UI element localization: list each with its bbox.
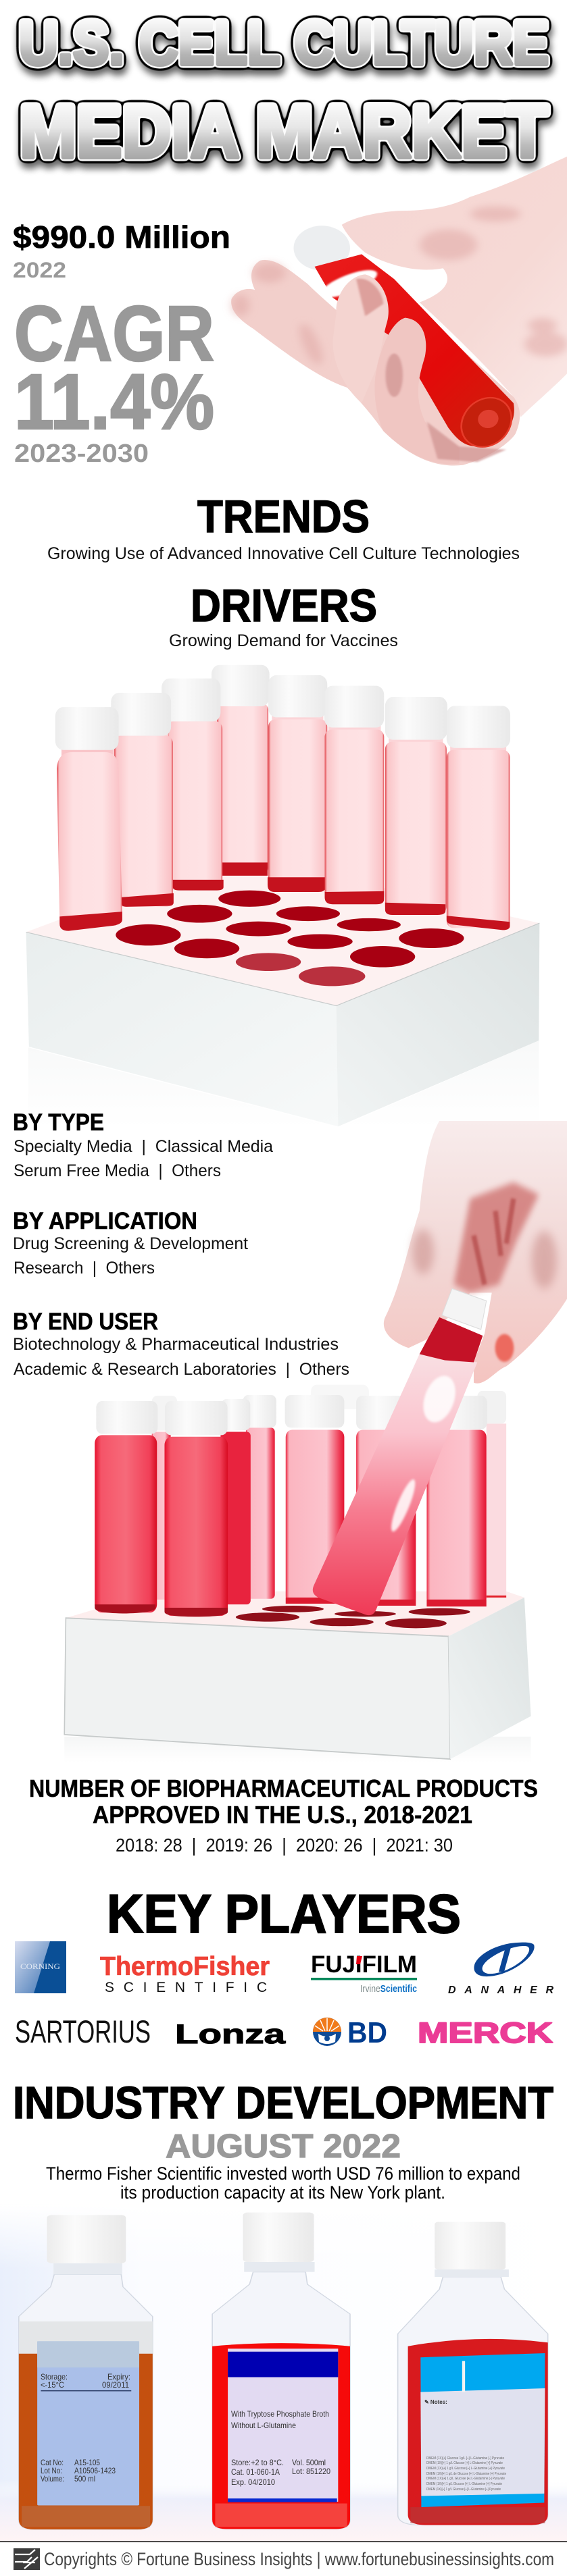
trends: [47, 491, 520, 563]
vial D: [243, 1395, 276, 1599]
bottle 2: Vol. 500ml: [292, 2458, 326, 2467]
key player logos: [15, 1941, 553, 2049]
logo: Danaher: [448, 1943, 553, 1996]
development text line 1: Thermo Fisher Scientific invested worth USD 76 million to expand: [46, 2163, 520, 2184]
forecast period: 2023-2030: [14, 440, 149, 468]
bottle 3: DMEM (1X)[+] 1 g/L Glucose [+] L-Glutamine [+] Pyruvate: [426, 2461, 503, 2465]
drivers text: Growing Demand for Vaccines: [169, 631, 398, 650]
bottle 3: DMEM (1X)[+] 1 g/L Glucose [+] L-Glutamine [+] Pyruvate: [426, 2467, 505, 2471]
glove palm shadow: [454, 1182, 539, 1292]
bottle 1: A15-105: [74, 2458, 100, 2467]
key players heading: KEY PLAYERS: [107, 1884, 461, 1945]
vial C: [220, 1399, 251, 1604]
logo: Thermo Fisher Scientific: SCIENTIFIC: [105, 1980, 267, 1995]
photo: pink vials in white rack: [26, 665, 539, 1128]
bottle 1: A10506-1423: [74, 2466, 116, 2475]
bottle 2: [212, 2213, 350, 2529]
vial 7: [385, 697, 447, 915]
bottle 1: Expiry:: [107, 2372, 130, 2382]
vial 3: [162, 679, 224, 891]
bottle 1: 09/2011: [102, 2380, 129, 2390]
red tube: [315, 255, 514, 446]
glove arm: [342, 157, 567, 417]
market value: $990.0 Million: [13, 219, 230, 255]
rack left face: [64, 1618, 450, 1759]
yearly figures: 2018: 28 | 2019: 26 | 2020: 26 | 2021: 30: [116, 1835, 453, 1856]
date: AUGUST 2022: [166, 2128, 401, 2165]
photo: three culture media bottles: [0, 2205, 567, 2542]
logo: Thermo Fisher Scientific: [100, 1952, 270, 1995]
tube bottom: [452, 390, 520, 454]
tube highlight: [317, 265, 381, 303]
lifted tube cap: [442, 1288, 487, 1330]
back vial centre cap: [311, 1385, 369, 1409]
photo background: [0, 2205, 567, 2542]
vial 5: [268, 675, 327, 892]
rack top: [26, 854, 539, 1005]
bottle 2: Store:+2 to 8°C.: [231, 2458, 284, 2467]
bottle 2: Exp. 04/2010: [231, 2477, 275, 2487]
glove palm and fingers: [231, 260, 520, 465]
bottle 1: Cat No:: [41, 2458, 64, 2467]
vial 1: [55, 707, 122, 931]
logo: Lonza: Lonza: [175, 2020, 286, 2049]
rack holes: [116, 891, 464, 986]
lower finger: [374, 318, 460, 464]
drivers heading: DRIVERS: [191, 580, 377, 631]
bottle 1: <-15°C: [41, 2380, 64, 2390]
tube cap: [294, 226, 350, 270]
rack reflection: [28, 1041, 539, 1128]
by type heading: BY TYPE: [13, 1109, 104, 1136]
back vial far right: [477, 1391, 506, 1598]
fingertip blotch: [356, 279, 383, 316]
trends text: Growing Use of Advanced Innovative Cell Culture Technologies: [47, 544, 520, 563]
CAGR value: 11.4%: [14, 358, 214, 446]
bottle 3: [398, 2222, 548, 2525]
lifted tube body: [313, 1354, 477, 1615]
development text line 2: its production capacity at its New York plant.: [120, 2182, 445, 2203]
logo: Fujifilm Irvine Scientific: [311, 1951, 417, 1995]
logo: Sartorius: SARTORIUS: [15, 2014, 151, 2049]
by application options line 2: Research | Others: [14, 1259, 155, 1278]
by application options line 1: Drug Screening & Development: [13, 1234, 248, 1253]
by end user: [13, 1309, 349, 1379]
market size stats: [13, 219, 230, 468]
bottle 1: Lot No:: [41, 2466, 62, 2475]
photo: gloved hand holding red tube: [231, 157, 567, 465]
logo: BD: [313, 2016, 387, 2049]
bottle 3: ✎ Notes:: [424, 2399, 447, 2405]
rack top: [66, 1592, 524, 1636]
CAGR label: CAGR: [14, 290, 214, 377]
logo: Merck: MERCK: [418, 2017, 553, 2049]
bottle 1: 500 ml: [74, 2474, 95, 2483]
glove blotches: [231, 206, 567, 367]
logo: Danaher: DANAHER: [448, 1984, 553, 1996]
palm red streaks: [474, 1199, 514, 1284]
by type options line 1: Specialty Media | Classical Media: [14, 1137, 273, 1156]
bottle 1: Volume:: [41, 2474, 64, 2483]
vial F: [356, 1396, 416, 1606]
by application heading: BY APPLICATION: [13, 1208, 197, 1234]
rack right face: [337, 923, 539, 1126]
icon: Fortune Business Insights logo: [14, 2548, 40, 2570]
by type: [13, 1109, 273, 1180]
industry development: [13, 2078, 553, 2203]
bottle 1: [19, 2215, 153, 2529]
by end user options line 2: Academic & Research Laboratories | Others: [14, 1360, 349, 1379]
rack holes: [236, 1606, 470, 1628]
glove: [384, 1121, 567, 1384]
footer: [14, 2548, 554, 2570]
drivers: [169, 580, 398, 650]
vial 2: [111, 693, 174, 907]
rack right face: [449, 1598, 531, 1759]
logo: BD: BD: [347, 2016, 387, 2049]
vial A: [95, 1401, 157, 1614]
logo: Fujifilm Irvine Scientific: IrvineScientific: [360, 1983, 417, 1995]
by end user heading: BY END USER: [13, 1309, 158, 1335]
approved biopharmaceutical products: [29, 1775, 538, 1856]
by end user options line 1: Biotechnology & Pharmaceutical Industries: [13, 1335, 339, 1354]
bottle 2: Without L-Glutamine: [231, 2421, 296, 2430]
back vial left: [152, 1396, 177, 1600]
lifted tube neck fluid: [420, 1317, 483, 1362]
bottle 3: DMEM (1X)[+] 1 g/L Glucose [+] L-Glutamine [+] Pyruvate: [426, 2482, 502, 2486]
title: [19, 9, 549, 174]
rack reflection: [64, 1737, 531, 1762]
finger over tube: [332, 274, 389, 403]
logo: Corning: CORNING: [20, 1963, 60, 1971]
bottle 3: DMEM (1X)[+] 1 g/L de Glucose [+] L-Glutamine [+] Pyruvate: [426, 2472, 506, 2476]
rack left face: [26, 932, 338, 1126]
logo: Corning: [15, 1941, 66, 1993]
lifted tube highlights: [387, 1370, 462, 1534]
vial 4: [212, 665, 270, 876]
by type options line 2: Serum Free Media | Others: [14, 1161, 221, 1180]
fingertip red patch: [495, 1334, 514, 1362]
bottle 3: DMEM (1X)[+] 1 g/L Glucose [+] L-Glutamine [-] Pyruvate: [426, 2477, 505, 2481]
logo: Thermo Fisher Scientific: ThermoFisher: [100, 1952, 270, 1981]
bottle 2: With Tryptose Phosphate Broth: [231, 2409, 329, 2419]
by application: [13, 1208, 248, 1278]
bottle 1: Storage:: [41, 2372, 68, 2382]
vial 6: [324, 686, 384, 904]
trends heading: TRENDS: [197, 491, 370, 542]
base year: 2022: [13, 258, 66, 282]
vial 8: [447, 706, 510, 930]
glove blotches: [412, 1230, 557, 1288]
bottle 3: DMEM (1X)[+] Glucose 1g/L [+] L-Glutamine [-] Pyruvate: [426, 2456, 504, 2461]
vial B: [164, 1401, 228, 1616]
bottle 2: Lot: 851220: [292, 2467, 330, 2476]
vial E: [285, 1395, 344, 1604]
fold shadows: [385, 353, 506, 462]
logo: Fujifilm Irvine Scientific: FUJIFILM: [311, 1951, 417, 1978]
vial G: [426, 1396, 487, 1606]
stat heading line 2: APPROVED IN THE U.S., 2018-2021: [93, 1801, 472, 1829]
bottle 3: DMEM (1X)[+] 1 g/L Glucose [+] L-Glutamine [+] Pyruvate: [426, 2488, 501, 2492]
photo: gloved hand lifting tube from red vial rack: [64, 1121, 567, 1762]
bottle 2: Cat. 01-060-1A: [231, 2467, 280, 2477]
